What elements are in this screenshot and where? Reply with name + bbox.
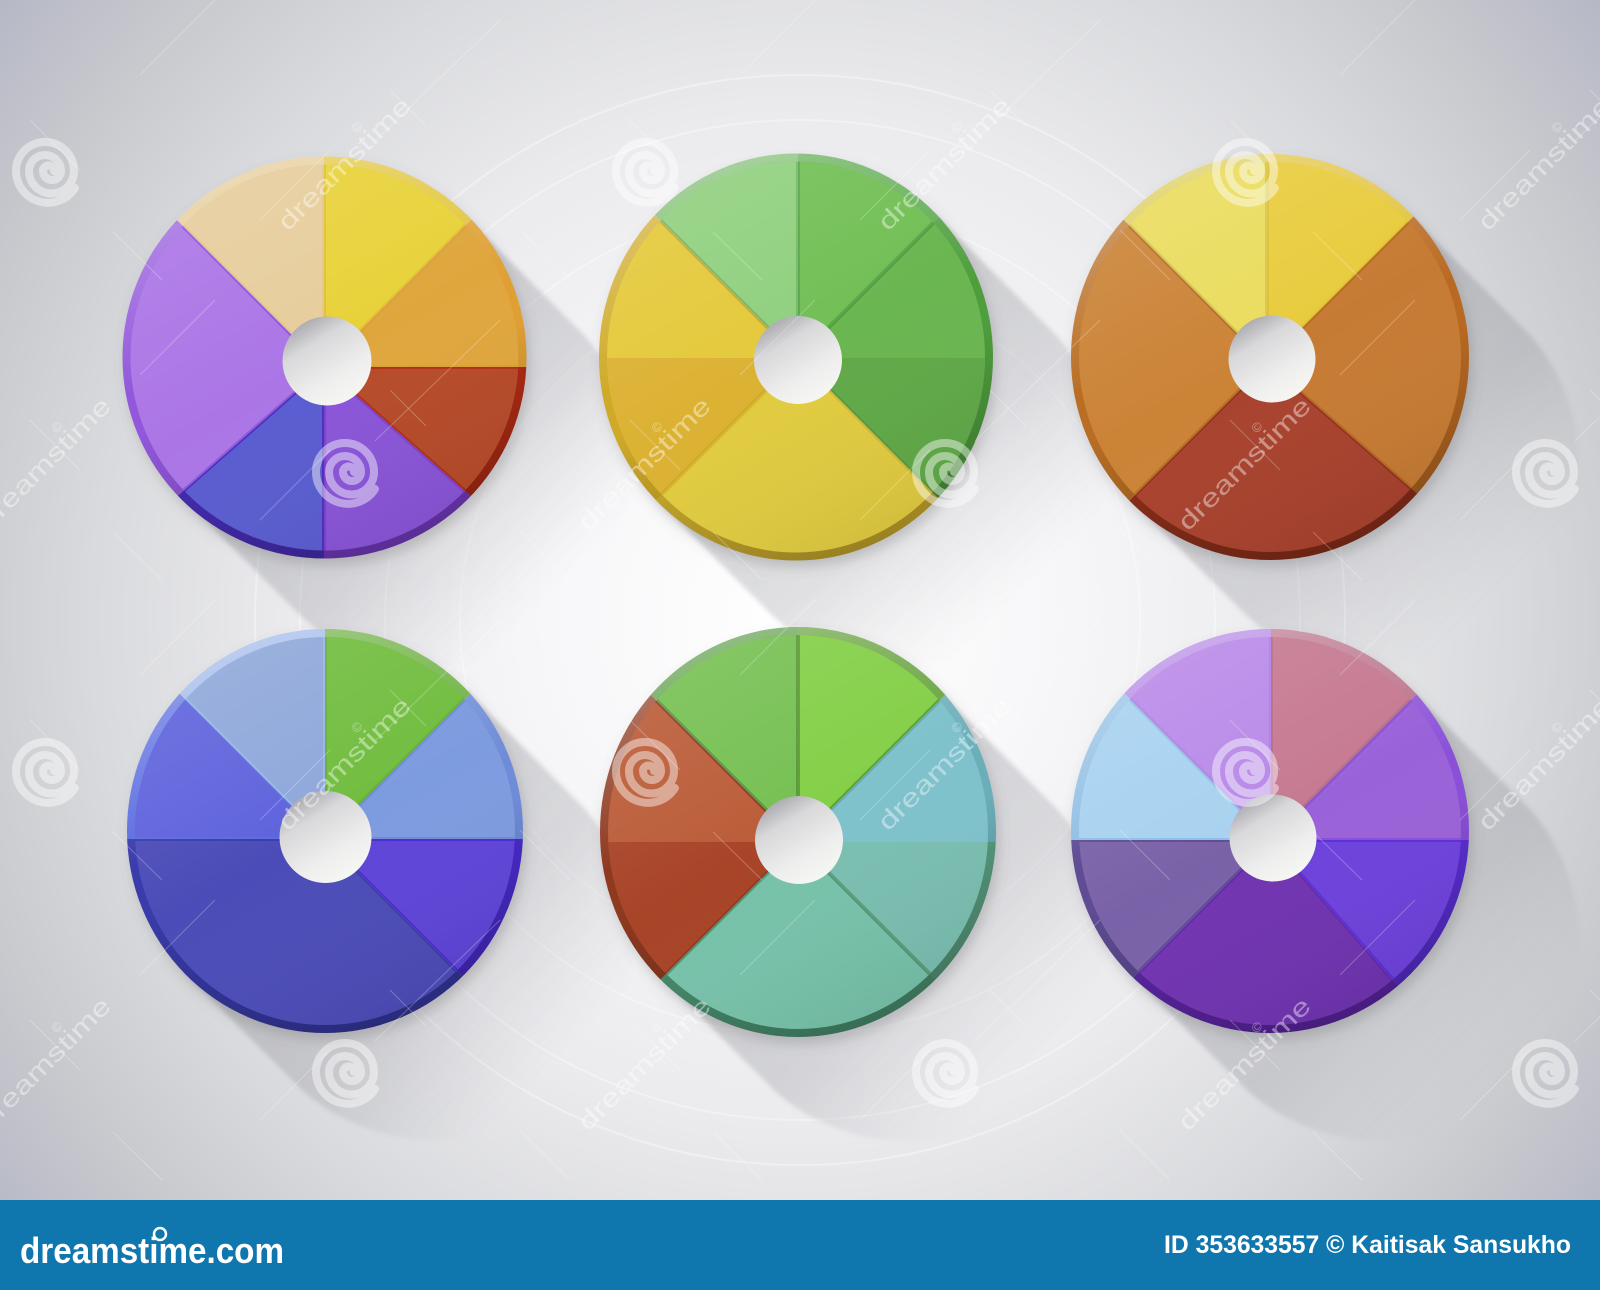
watermark text: © xyxy=(948,718,966,736)
watermark text: © xyxy=(1548,118,1566,136)
icon: logo spiral xyxy=(154,1228,166,1240)
watermark text: © xyxy=(48,418,66,436)
watermark text: © xyxy=(348,118,366,136)
rim segments 5 xyxy=(374,418,1222,1266)
faces 2 xyxy=(607,162,985,552)
watermark text: © xyxy=(1248,418,1266,436)
rim segments 2 xyxy=(599,154,993,560)
faces 5 xyxy=(374,420,1222,1266)
shadow 6 xyxy=(1074,636,1579,1140)
watermark text: dreamstime xyxy=(272,92,417,236)
faces 1 xyxy=(130,164,518,550)
donut chart 1: purple, yellow, orange, red xyxy=(122,156,620,651)
donut chart 3: yellow, orange, red xyxy=(1070,154,1570,648)
watermark text: dreamstime xyxy=(572,992,717,1136)
watermark text: dreamstime xyxy=(1172,392,1317,536)
rim segments 3 xyxy=(1071,154,1469,560)
watermark text: dreamstime xyxy=(872,692,1017,836)
watermark text: © xyxy=(1248,1018,1266,1036)
footer logo text: dreamstime.com xyxy=(20,1230,284,1271)
center hole 1 xyxy=(282,316,372,406)
shadow 1 xyxy=(126,164,634,667)
rim segments 1 xyxy=(122,156,526,558)
shadow 3 xyxy=(1074,161,1579,666)
watermark text: © xyxy=(648,418,666,436)
donut chart 5: green, teal, red xyxy=(598,627,1090,1135)
shadow 4 xyxy=(130,636,634,1140)
watermark spirals xyxy=(16,142,1575,1104)
concentric background rings xyxy=(255,75,1345,1165)
footer bar xyxy=(0,1200,1600,1290)
center hole 5 xyxy=(755,796,843,884)
watermark text: © xyxy=(648,1018,666,1036)
rim segments 6 xyxy=(847,416,1600,1240)
center hole 3 xyxy=(1228,316,1316,402)
rim segments 4 xyxy=(127,629,523,1033)
watermark text: dreamstime xyxy=(1472,692,1600,836)
center hole 4 xyxy=(280,791,372,883)
watermark text: dreamstime xyxy=(272,692,417,836)
faces 4 xyxy=(135,637,515,1025)
watermark text: © xyxy=(348,718,366,736)
watermark text: © xyxy=(948,118,966,136)
watermark text: © xyxy=(1548,718,1566,736)
watermark text: © xyxy=(48,1018,66,1036)
watermark text: dreamstime xyxy=(1172,992,1317,1136)
footer credit text: ID 353633557 © Kaitisak Sansukho xyxy=(1164,1231,1571,1259)
watermark text: dreamstime xyxy=(572,392,717,536)
watermark text: dreamstime xyxy=(1472,92,1600,236)
watermark text: dreamstime xyxy=(872,92,1017,236)
center hole 6 xyxy=(1230,794,1316,882)
shadow 2 xyxy=(602,161,1105,666)
faces 3 xyxy=(1079,162,1461,552)
shadow 5 xyxy=(603,634,1107,1141)
faces 6 xyxy=(849,418,1600,1240)
donut chart 4: blues and green xyxy=(126,629,618,1132)
donut chart 6: purples, pink, light blue xyxy=(847,416,1600,1240)
donut chart 2: green and yellow xyxy=(598,154,1090,652)
center hole 2 xyxy=(754,316,842,404)
